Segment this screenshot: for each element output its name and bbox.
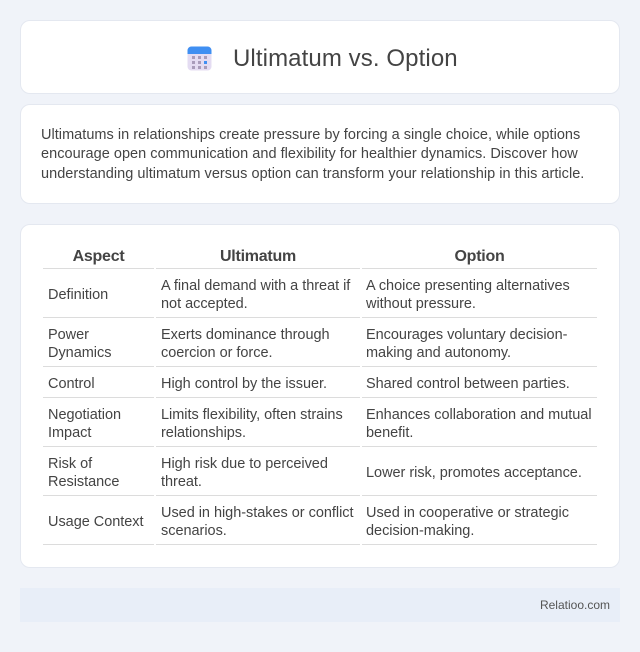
row: usage context: scenarios.: [161, 523, 227, 539]
column headings: Ultimatum: [220, 248, 296, 265]
row: definition: not accepted.: [161, 296, 248, 312]
row: power dynamics: [48, 327, 567, 361]
row: definition: Definition: [48, 287, 108, 303]
column headings: Aspect: [73, 248, 124, 265]
title: Ultimatum vs. Option: [233, 45, 458, 72]
row: definition: A choice presenting alternatives: [366, 278, 570, 294]
row: negotiation impact: Impact: [48, 425, 91, 441]
row: control: Shared control between parties.: [366, 376, 570, 392]
intro text: understanding ultimatum versus option can transform your relationship in this article.: [41, 166, 584, 182]
header panel: [20, 20, 620, 94]
row: control: Control: [48, 376, 95, 392]
intro text: [41, 127, 584, 182]
row: usage context: [48, 505, 569, 539]
row: negotiation impact: Negotiation: [48, 407, 121, 423]
table panel: [20, 224, 620, 568]
row: negotiation impact: benefit.: [366, 425, 413, 441]
row: negotiation impact: Limits flexibility, often strains: [161, 407, 343, 423]
row: negotiation impact: Enhances collaboration and mutual: [366, 407, 592, 423]
row: control: [48, 376, 570, 392]
row: definition: [48, 278, 570, 312]
footer bar: [20, 588, 620, 622]
row: power dynamics: Dynamics: [48, 345, 111, 361]
row: negotiation impact: [48, 407, 592, 441]
row: usage context: decision-making.: [366, 523, 474, 539]
row: risk of resistance: High risk due to perceived: [161, 456, 328, 472]
row: definition: A final demand with a threat if: [161, 278, 350, 294]
row: risk of resistance: Lower risk, promotes acceptance.: [366, 465, 582, 481]
row: power dynamics: coercion or force.: [161, 345, 272, 361]
column headings: Option: [454, 248, 505, 265]
column headings: [73, 248, 505, 265]
row: power dynamics: Exerts dominance through: [161, 327, 330, 343]
intro panel: [20, 104, 620, 204]
row: power dynamics: Power: [48, 327, 89, 343]
row: power dynamics: Encourages voluntary decision-: [366, 327, 567, 343]
row: power dynamics: making and autonomy.: [366, 345, 511, 361]
row: risk of resistance: threat.: [161, 474, 202, 490]
row: risk of resistance: [48, 456, 582, 490]
intro text: encourage open communication and flexibility for healthier dynamics. Discover how: [41, 146, 578, 162]
row: control: High control by the issuer.: [161, 376, 327, 392]
row: risk of resistance: Resistance: [48, 474, 119, 490]
row: usage context: Usage Context: [48, 514, 144, 530]
row: usage context: Used in high-stakes or conflict: [161, 505, 354, 521]
row: risk of resistance: Risk of: [48, 456, 92, 472]
footer credit: Relatioo.com: [540, 598, 610, 612]
icon: calendar: [188, 46, 212, 70]
row: negotiation impact: relationships.: [161, 425, 246, 441]
intro text: Ultimatums in relationships create pressure by forcing a single choice, while options: [41, 127, 580, 143]
row: definition: without pressure.: [366, 296, 476, 312]
row: usage context: Used in cooperative or strategic: [366, 505, 569, 521]
